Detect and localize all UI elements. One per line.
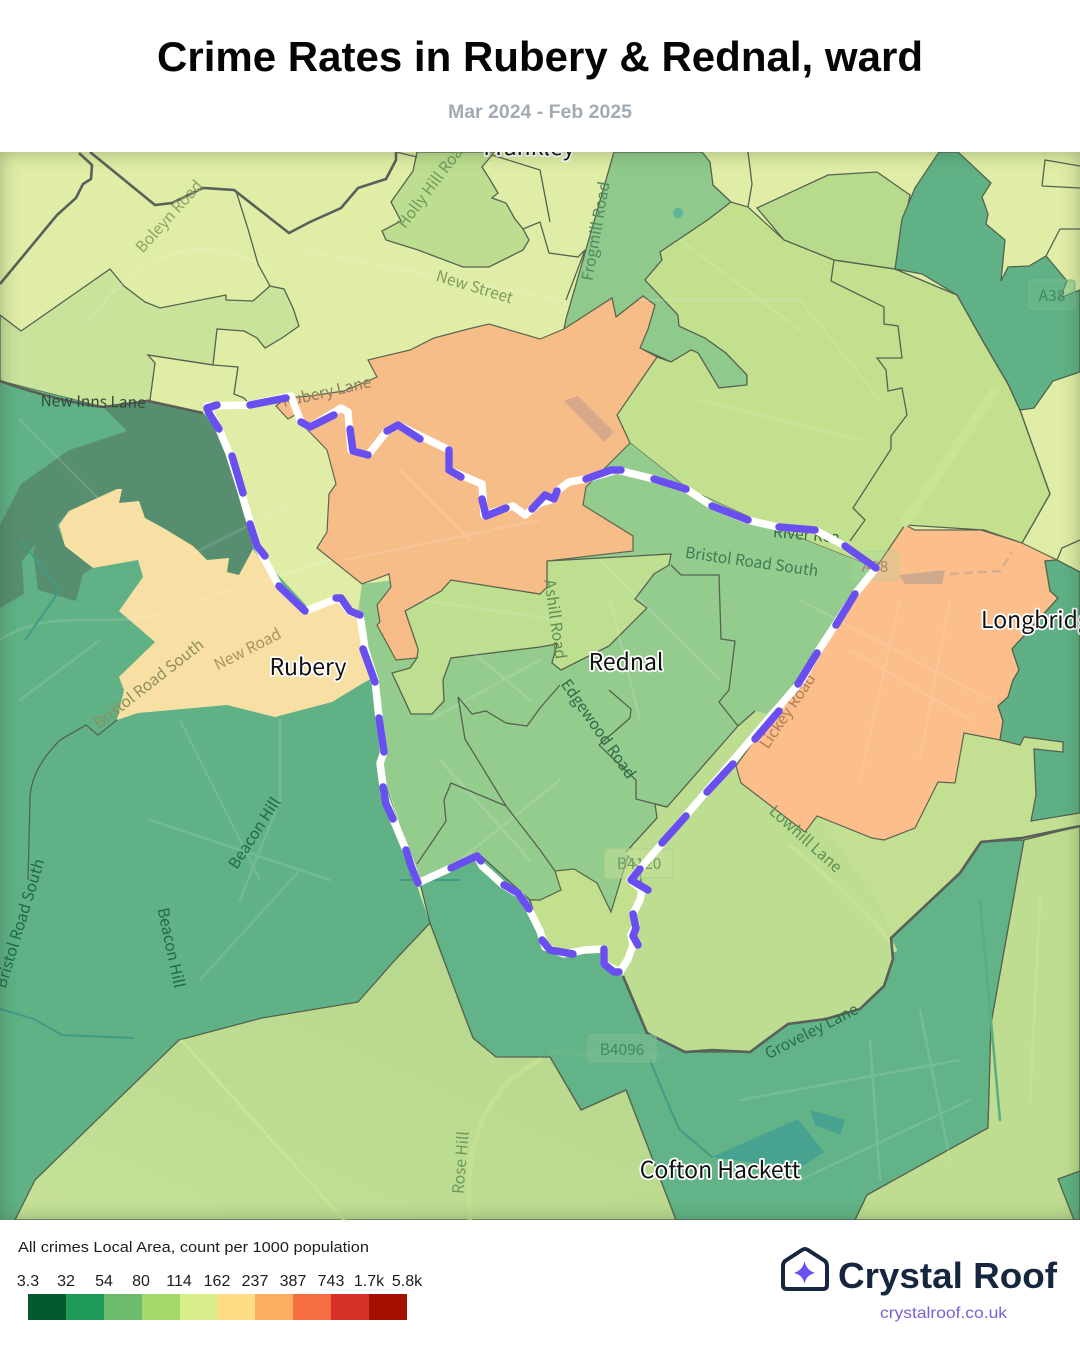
label: New Street: New Street <box>434 264 516 308</box>
road labels <box>0 134 862 1195</box>
area: Rubery tan <box>59 489 375 720</box>
area: orange dark patch <box>564 396 614 442</box>
legend labels: 162 <box>204 1273 230 1290</box>
legend labels: 387 <box>280 1273 306 1290</box>
legend title: All crimes Local Area, count per 1000 population <box>18 1239 369 1256</box>
route: purple dashes <box>207 398 876 972</box>
area: south-west light green <box>15 923 676 1220</box>
white footer mask <box>0 1220 1080 1350</box>
area: corner dark green <box>1058 1171 1080 1220</box>
logo wordmark: Crystal Roof <box>838 1255 1058 1296</box>
label: Rose Hill: Rose Hill <box>446 1130 474 1195</box>
road shield: B4096 <box>588 1035 656 1062</box>
legend labels: 237 <box>242 1273 268 1290</box>
logo: Crystal Roof <box>783 1249 1058 1322</box>
legend labels <box>17 1273 423 1290</box>
road shield: A38 east: A38 <box>1039 284 1065 306</box>
legend labels: 80 <box>132 1273 150 1290</box>
place label: Rubery: Rubery <box>269 648 347 682</box>
main roads <box>180 524 1002 1220</box>
white header mask <box>0 128 1080 152</box>
area: south dark green <box>420 840 1024 1220</box>
website link: crystalroof.co.uk <box>880 1305 1008 1322</box>
area: Holly Hill <box>382 152 529 267</box>
area: Frogmill green <box>564 152 747 388</box>
road shield: A38 centre: A38 <box>862 555 888 577</box>
area: Ashill light green <box>392 554 671 714</box>
legend labels: 743 <box>318 1273 344 1290</box>
road shield: B4120: B4120 <box>617 852 661 874</box>
route: white base line <box>207 396 876 972</box>
label: New Road: New Road <box>210 622 285 675</box>
label: Lowhill Lane: Lowhill Lane <box>765 800 847 877</box>
place label: Rednal: Rednal <box>589 643 663 677</box>
area: Lowhill light green lobe <box>622 711 1005 1051</box>
streams and lakes <box>0 208 845 1169</box>
area: upper centre light green <box>617 202 1050 568</box>
area: south-east light green <box>855 826 1080 1220</box>
area: orange east grey industrial patch <box>899 570 945 584</box>
label: Beacon Hill south: Beacon Hill <box>153 906 191 990</box>
legend labels: 32 <box>57 1273 75 1290</box>
title: Crime Rates in Rubery & Rednal, ward <box>157 33 923 80</box>
label: Bristol Road South: Bristol Road South <box>89 633 208 733</box>
label: Beacon Hill north: Beacon Hill <box>223 793 285 873</box>
area: north-west mid green <box>0 269 299 407</box>
road network <box>0 240 1040 1180</box>
area: east dark green <box>998 560 1080 821</box>
label: Rubery Lane: Rubery Lane <box>280 370 373 412</box>
area: top centre green <box>757 172 910 269</box>
label: Ashill Road: Ashill Road <box>539 578 572 660</box>
area: central mid green <box>358 443 876 912</box>
place label: Frankley: Frankley <box>483 128 575 162</box>
area: small light green south of route <box>530 856 642 972</box>
road shield: B4120 <box>605 849 673 878</box>
label: Holly Hill Road: Holly Hill Road <box>392 134 473 232</box>
legend <box>17 1273 423 1320</box>
subtitle: date range: Mar 2024 - Feb 2025 <box>448 102 632 123</box>
area: north-east dark green <box>895 152 1080 410</box>
legend labels: 3.3 <box>17 1273 39 1290</box>
area: orange north <box>276 296 657 660</box>
icon: house with star <box>783 1249 827 1289</box>
road shield: A38 east <box>1029 280 1075 309</box>
area: upper lobe of Lowhill <box>817 733 1080 938</box>
legend labels: 5.8k <box>392 1273 423 1290</box>
area: orange east Longbridge <box>736 525 1058 840</box>
label: Bristol Road South, east: Bristol Road South <box>684 541 820 581</box>
area boundary lines <box>28 152 1080 880</box>
legend colour swatches <box>28 1294 407 1320</box>
legend labels: 1.7k <box>354 1273 385 1290</box>
legend labels: 54 <box>95 1273 113 1290</box>
label: Frogmill Road: Frogmill Road <box>576 180 615 282</box>
legend labels: 114 <box>166 1273 192 1290</box>
area: west dark green <box>0 381 430 1220</box>
label: River Rea: River Rea <box>772 520 841 548</box>
place label: Cofton Hackett: Cofton Hackett <box>640 1151 801 1185</box>
label: Groveley Lane: Groveley Lane <box>761 998 862 1064</box>
road shield: B4096: B4096 <box>600 1038 644 1060</box>
ward boundary route <box>207 396 876 972</box>
dashed road in orange east <box>950 552 1012 574</box>
thick ward boundary lines <box>0 152 1080 1052</box>
area: west dark overlay <box>0 401 253 608</box>
label: Edgewood Road: Edgewood Road <box>556 674 642 783</box>
label: New Inns Lane: New Inns Lane <box>40 389 146 413</box>
label: Boleyn Road: Boleyn Road <box>130 175 207 257</box>
label: Lickey Road: Lickey Road <box>754 669 820 753</box>
road shield: A38 centre <box>852 551 898 580</box>
